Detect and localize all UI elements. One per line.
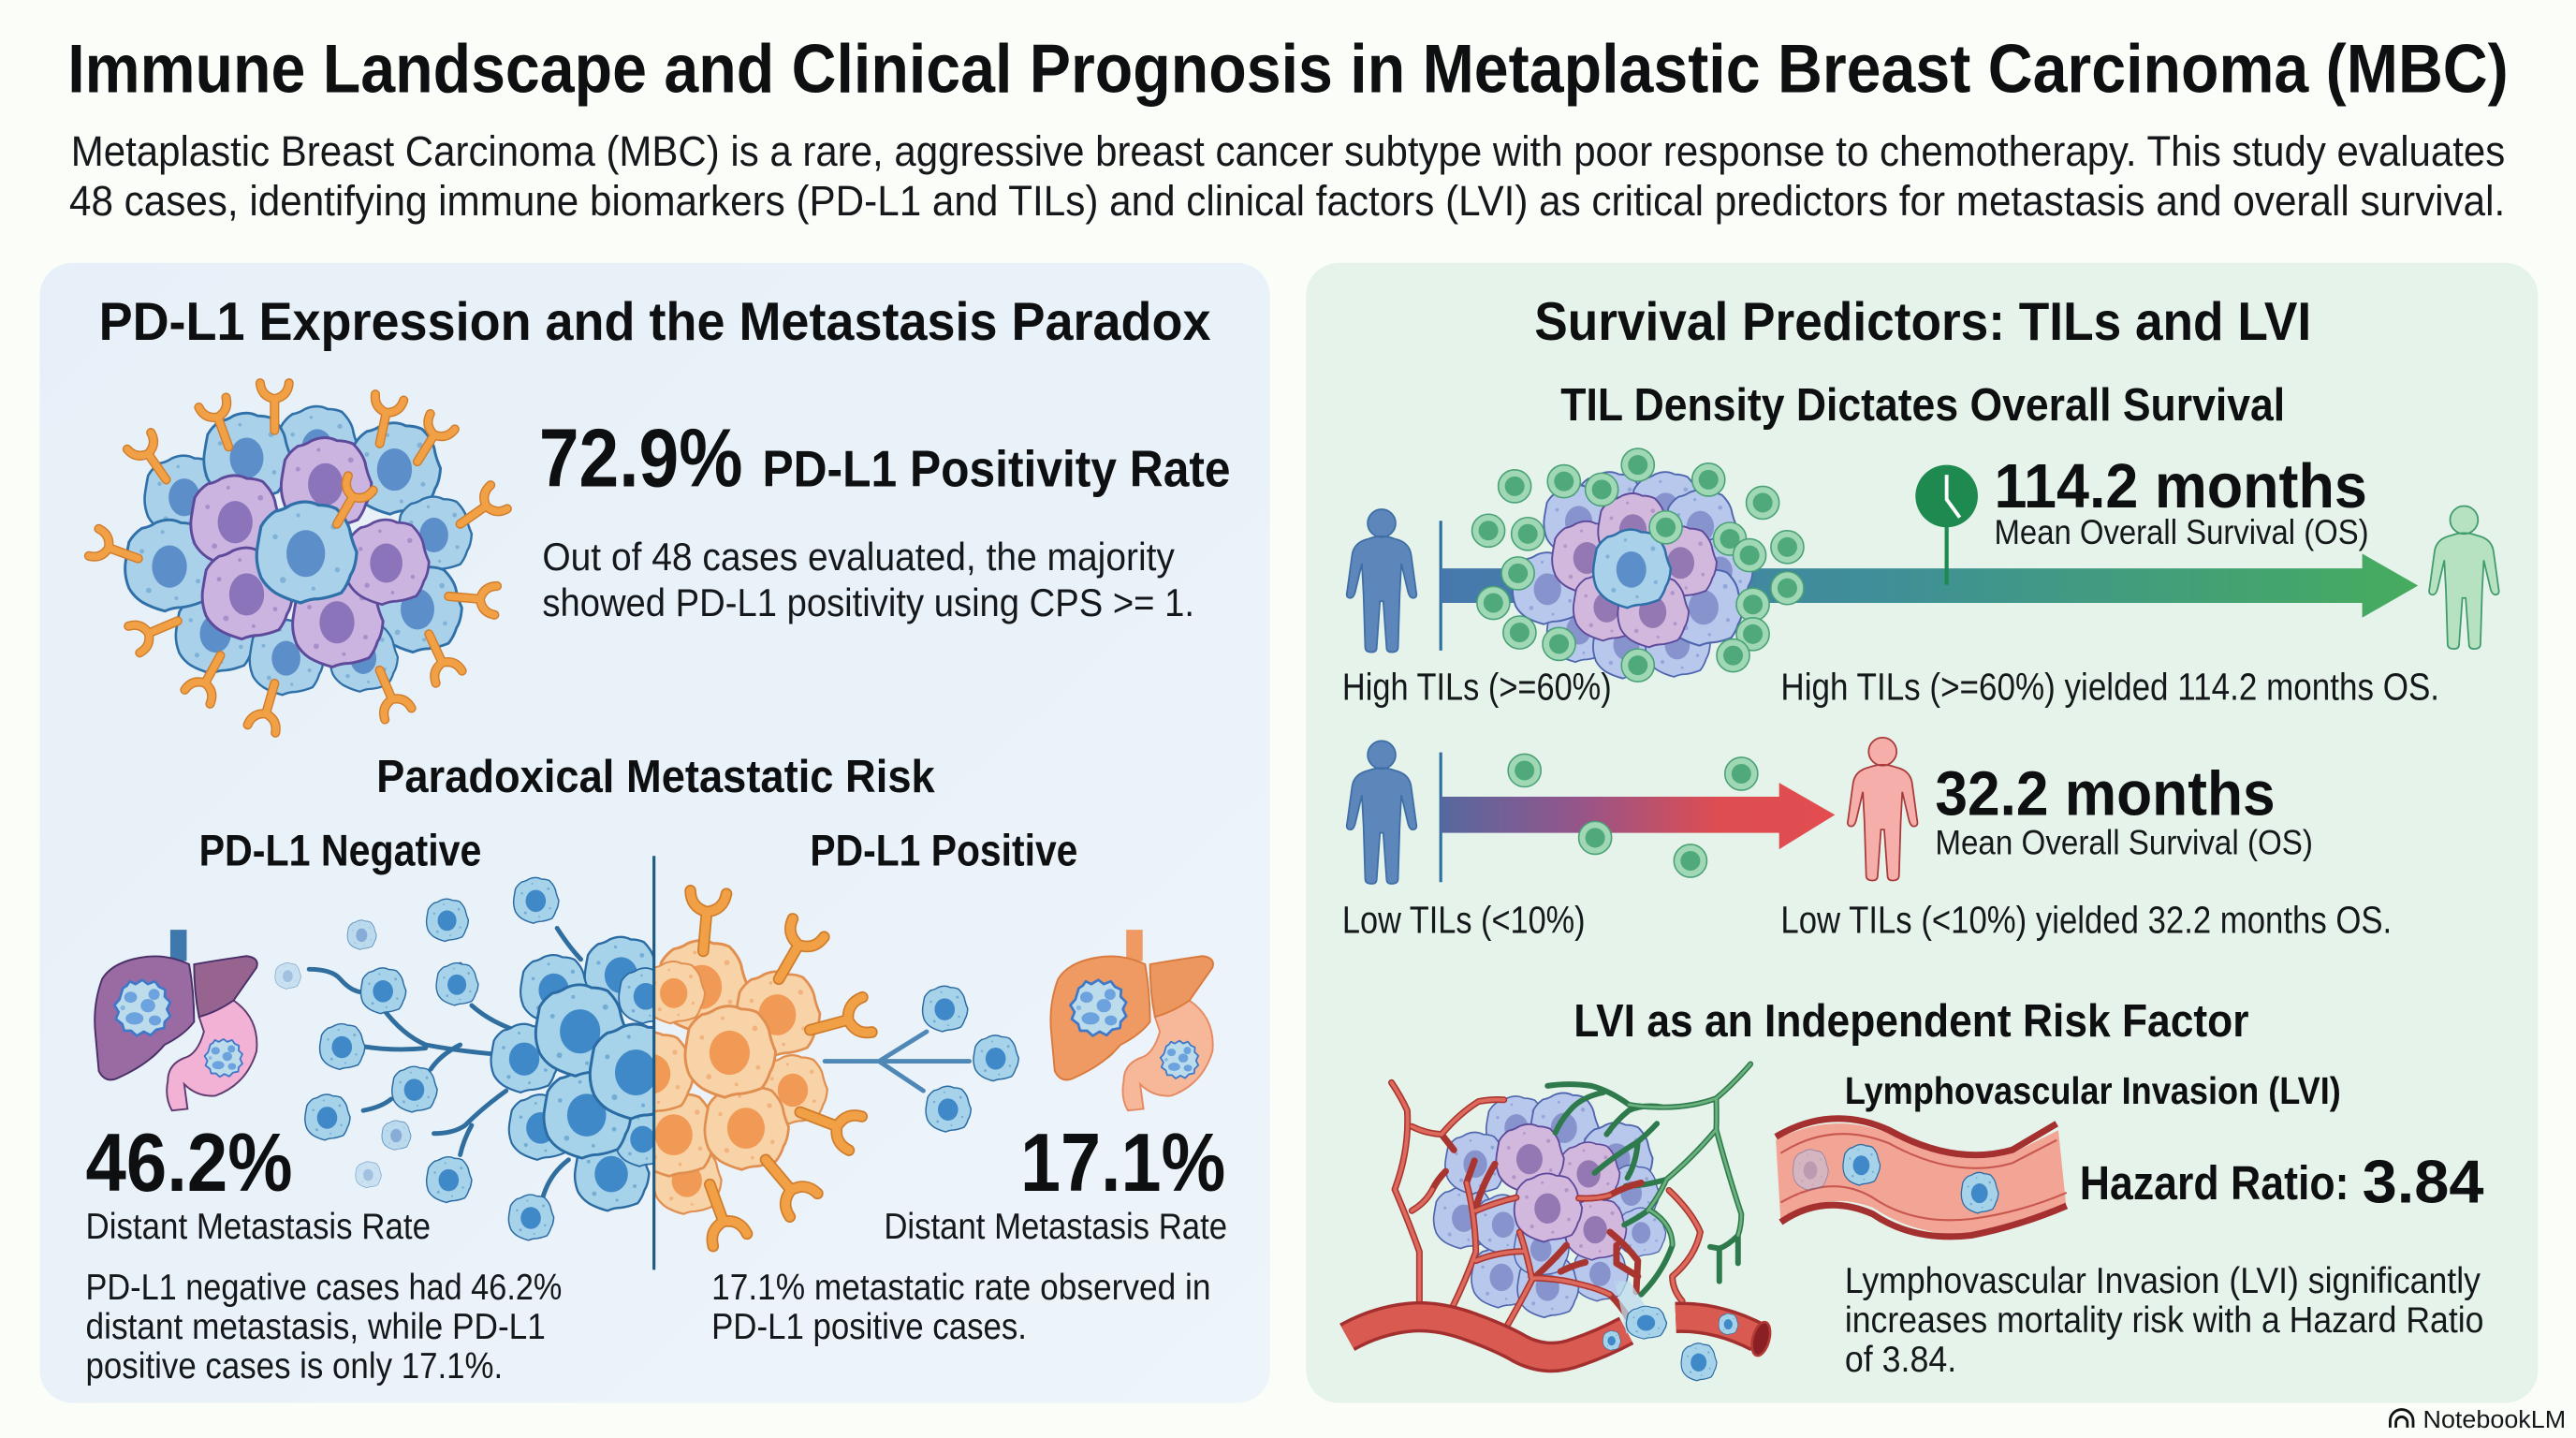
logo: NotebookLM: NotebookLM bbox=[2423, 1405, 2566, 1433]
intro text bbox=[69, 127, 2505, 225]
panel: survival predictors bbox=[1306, 263, 2538, 1403]
icon: tumor with dense TILs bbox=[1472, 448, 1804, 682]
text: PD-L1 positive description bbox=[711, 1268, 1211, 1347]
stat: 32.2 months bbox=[1935, 759, 2313, 861]
illustration: vessel with invading cells bbox=[1776, 1119, 2067, 1237]
text: LVI description: increases mortality risk with a Hazard Ratio bbox=[1845, 1300, 2483, 1341]
text: positivity description: showed PD-L1 positivity using CPS >= 1. bbox=[542, 580, 1194, 624]
text: PD-L1 negative description bbox=[86, 1268, 562, 1387]
panel heading: PD-L1: PD-L1 Expression and the Metastasis Paradox bbox=[99, 292, 1211, 352]
caption: high TILs result: High TILs (>=60%) yielded 114.2 months OS. bbox=[1780, 666, 2439, 709]
text: positivity description: Out of 48 cases evaluated, the majority bbox=[542, 535, 1175, 579]
stat: hazard ratio: Hazard Ratio: bbox=[2080, 1156, 2349, 1210]
stat: 46.2%: 46.2% bbox=[86, 1117, 293, 1209]
divider line between negative and positive bbox=[653, 856, 655, 1269]
stat: 17.1%: 17.1% bbox=[1020, 1117, 1225, 1209]
illustration: split tumor, blue half bbox=[490, 936, 653, 1211]
stat: hazard ratio bbox=[2080, 1147, 2483, 1215]
stat: 17.1%: Distant Metastasis Rate bbox=[884, 1207, 1227, 1247]
text: positivity description bbox=[542, 535, 1194, 624]
panel heading: survival: Survival Predictors: TILs and LVI bbox=[1534, 292, 2311, 352]
stat: 17.1% bbox=[884, 1117, 1227, 1247]
label: PD-L1 positive: PD-L1 Positive bbox=[810, 827, 1077, 876]
text: LVI description: Lymphovascular Invasion (LVI) significantly bbox=[1845, 1261, 2481, 1301]
icon: tumor cluster with PD-L1 receptors bbox=[89, 383, 507, 733]
stat: 114.2 months: Mean Overall Survival (OS) bbox=[1995, 513, 2369, 551]
icon: clock pin bbox=[1915, 465, 1978, 585]
low TIL baseline bar bbox=[1440, 753, 1442, 882]
text: LVI description: of 3.84. bbox=[1845, 1340, 1956, 1380]
stat: 114.2 months: 114.2 months bbox=[1995, 452, 2367, 521]
label: low TILs: Low TILs (<10%) bbox=[1342, 899, 1586, 942]
text: LVI description bbox=[1845, 1261, 2483, 1380]
high TIL baseline bar bbox=[1440, 521, 1442, 651]
subheading: LVI: LVI as an Independent Risk Factor bbox=[1573, 996, 2249, 1047]
illustration: split tumor, orange half with receptors bbox=[655, 885, 878, 1253]
text: PD-L1 negative description: PD-L1 negative cases had 46.2% bbox=[86, 1268, 562, 1308]
stat: PD-L1 positivity rate: PD-L1 Positivity Rate bbox=[762, 440, 1231, 497]
text: PD-L1 negative description: positive cases is only 17.1%. bbox=[86, 1346, 503, 1387]
subheading: paradoxical metastatic risk: Paradoxical Metastatic Risk bbox=[376, 752, 935, 802]
stat: 114.2 months bbox=[1995, 452, 2369, 551]
arrow: high TIL survival timeline bbox=[1441, 553, 2418, 618]
icon: person high TILs bbox=[1347, 509, 1416, 653]
illustration: PD-L1 positive limited spread bbox=[825, 986, 1018, 1132]
stat: PD-L1 positivity rate bbox=[539, 412, 1231, 504]
stat: 32.2 months: 32.2 months bbox=[1935, 759, 2276, 829]
text: PD-L1 positive description: PD-L1 positive cases. bbox=[711, 1307, 1027, 1347]
stat: 32.2 months: Mean Overall Survival (OS) bbox=[1935, 823, 2313, 861]
illustration: PD-L1 negative metastatic spread bbox=[275, 877, 581, 1240]
icon: healthy person bbox=[2429, 506, 2499, 649]
icon: liver and stomach with metastasis, PD-L1 negative bbox=[95, 930, 257, 1110]
icon: person low TILs bbox=[1347, 741, 1416, 884]
subheading: TIL density: TIL Density Dictates Overall Survival bbox=[1560, 380, 2285, 431]
icon: sparse TILs bbox=[1508, 754, 1758, 877]
stat: hazard ratio: 3.84 bbox=[2363, 1147, 2483, 1215]
label: high TILs: High TILs (>=60%) bbox=[1342, 666, 1612, 709]
caption: low TILs result: Low TILs (<10%) yielded 32.2 months OS. bbox=[1780, 899, 2392, 942]
stat: PD-L1 positivity rate: 72.9% bbox=[539, 412, 742, 504]
icon: liver and stomach with metastasis, PD-L1 positive bbox=[1050, 930, 1213, 1110]
label: PD-L1 negative: PD-L1 Negative bbox=[199, 827, 481, 876]
arrow: low TIL survival timeline bbox=[1441, 783, 1835, 849]
text: PD-L1 negative description: distant metastasis, while PD-L1 bbox=[86, 1307, 546, 1347]
icon: at-risk person bbox=[1848, 738, 1917, 881]
panel: PD-L1 expression and the metastasis paradox bbox=[39, 263, 1270, 1403]
LVI heading: Lymphovascular Invasion (LVI) bbox=[1845, 1069, 2341, 1112]
stat: 46.2% bbox=[86, 1117, 431, 1247]
text: PD-L1 positive description: 17.1% metastatic rate observed in bbox=[711, 1268, 1211, 1308]
stat: 46.2%: Distant Metastasis Rate bbox=[86, 1207, 431, 1247]
illustration: tumor with blood and lymph vessels bbox=[1347, 1064, 1774, 1381]
